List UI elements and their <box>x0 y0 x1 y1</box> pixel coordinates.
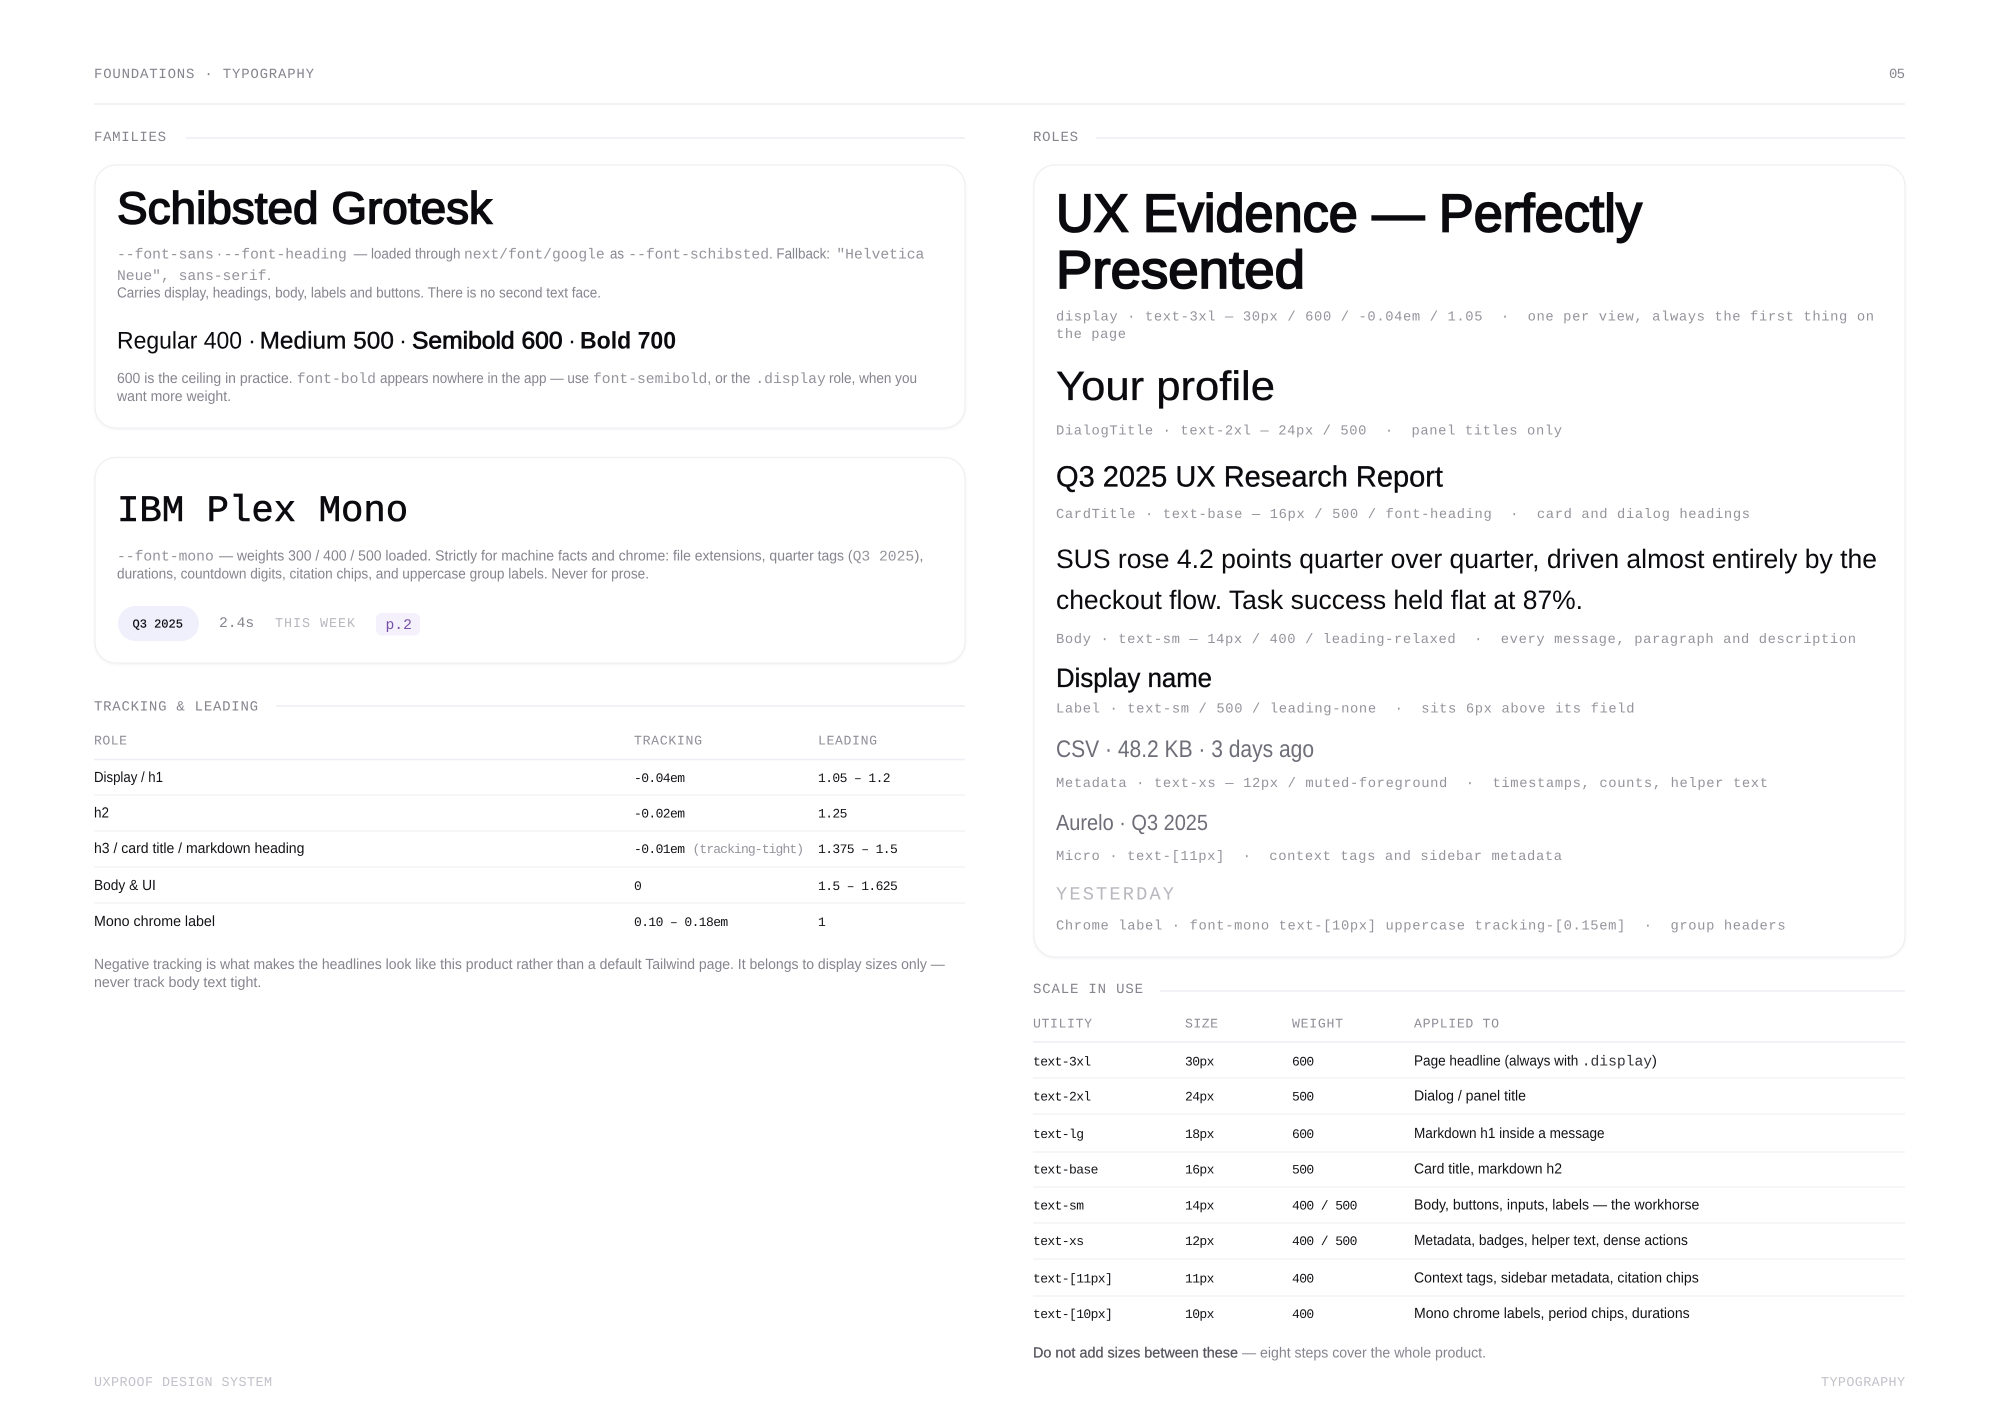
weights specimen: Medium 500 <box>260 328 394 354</box>
role: dialog title: Your profile <box>1056 363 1275 409</box>
tracking note <box>94 957 945 991</box>
row: text-[10px]: Mono chrome labels, period chips, durations <box>1414 1306 1690 1322</box>
tracking note: Negative tracking is what makes the headlines look like this product rather than a default Tailwind page. It belongs to display sizes only — <box>94 957 945 973</box>
row: h3: h3 / card title / markdown heading <box>94 841 304 857</box>
role: metadata: CSV · 48.2 KB · 3 days ago <box>1056 736 1314 763</box>
row: h3: 1.375 – 1.5 <box>818 842 897 857</box>
panel: Schibsted Grotesk family card <box>95 165 965 428</box>
role: display headline <box>1056 184 1874 343</box>
role: card title: CardTitle · text-base — 16px / 500 / font-heading · card and dialog headings <box>1056 508 1750 523</box>
page header: FOUNDATIONS · TYPOGRAPHY <box>94 67 315 83</box>
row: text-lg: Markdown h1 inside a message <box>1414 1126 1605 1142</box>
row: text-base: 16px <box>1185 1162 1215 1178</box>
row: mono chrome: 0.10 – 0.18em <box>634 915 728 930</box>
row: text-[10px]: 400 <box>1292 1307 1314 1322</box>
family description: · <box>217 246 222 262</box>
row: text-xs: Metadata, badges, helper text, dense actions <box>1414 1233 1688 1249</box>
row: text-3xl <box>1033 1053 1905 1078</box>
page header <box>94 67 1905 104</box>
role: metadata <box>1056 736 1768 792</box>
table header: SIZE <box>1185 1016 1218 1032</box>
row: text-3xl: ) <box>1652 1053 1657 1069</box>
row: text-3xl: 30px <box>1185 1054 1215 1069</box>
role: label: Display name <box>1056 663 1212 693</box>
family description: "Helvetica <box>836 248 925 264</box>
role: card title <box>1056 460 1750 523</box>
weights specimen: Bold 700 <box>580 328 676 354</box>
table header: ROLE <box>94 734 127 748</box>
weight note: font-bold <box>297 372 376 388</box>
role: dialog title: DialogTitle · text-2xl — 24px / 500 · panel titles only <box>1056 424 1562 440</box>
role: micro: Micro · text-[11px] · context tags and sidebar metadata <box>1056 850 1562 865</box>
row: h2: h2 <box>94 806 109 822</box>
row: h2 <box>94 806 965 831</box>
row: text-2xl: text-2xl <box>1033 1090 1091 1104</box>
row: text-lg: text-lg <box>1033 1127 1083 1142</box>
weight note: appears nowhere in the app — use <box>380 371 589 387</box>
scale note <box>1033 1346 1486 1362</box>
page footer <box>94 1376 1905 1391</box>
row: text-xs: 400 / 500 <box>1292 1234 1357 1249</box>
weight note <box>116 371 917 405</box>
page header: 05 <box>1889 67 1905 83</box>
row: text-3xl: text-3xl <box>1033 1054 1091 1069</box>
family description: next/font/google <box>464 248 605 264</box>
family description: Carries display, headings, body, labels and buttons. There is no second text face. <box>117 286 601 302</box>
row: text-base <box>1033 1162 1905 1187</box>
role: chrome label: YESTERDAY <box>1056 884 1174 906</box>
family description: . Fallback: <box>769 246 830 262</box>
chip: citation p.2 <box>376 613 420 636</box>
table header: UTILITY <box>1033 1016 1092 1032</box>
table: scale in use <box>1033 1016 1905 1322</box>
weight note: role, when you <box>829 371 917 387</box>
section heading: roles: ROLES <box>1033 130 1078 146</box>
weight note: .display <box>755 372 826 388</box>
role: dialog title <box>1056 363 1562 440</box>
scale note: — eight steps cover the whole product. <box>1242 1346 1486 1362</box>
chip: Q3 2025: Q3 2025 <box>132 617 183 631</box>
role: micro: Aurelo · Q3 2025 <box>1056 810 1208 835</box>
role: body: SUS rose 4.2 points quarter over quarter, driven almost entirely by the <box>1056 544 1877 574</box>
role: body: checkout flow. Task success held flat at 87%. <box>1056 585 1583 615</box>
role: display headline: display · text-3xl — 30px / 600 / -0.04em / 1.05 · one per view, always the first thing on <box>1056 310 1874 326</box>
weights specimen: Regular 400 <box>117 328 242 354</box>
family description: Q3 2025 <box>853 550 914 566</box>
row: h3: (tracking-tight) <box>692 842 804 857</box>
row: text-[11px] <box>1033 1270 1905 1296</box>
row: text-[10px]: 10px <box>1185 1307 1215 1322</box>
row: text-2xl: 24px <box>1185 1090 1215 1104</box>
family description: --font-heading <box>224 248 347 264</box>
row: text-sm: 400 / 500 <box>1292 1198 1357 1214</box>
family name: Schibsted Grotesk: Schibsted Grotesk <box>117 182 493 234</box>
row: text-2xl: Dialog / panel title <box>1414 1088 1526 1104</box>
row: text-[11px]: Context tags, sidebar metadata, citation chips <box>1414 1270 1699 1286</box>
row: text-lg: 600 <box>1292 1127 1314 1142</box>
row: display <box>94 770 965 795</box>
table header: TRACKING <box>634 734 702 748</box>
section heading: families: FAMILIES <box>94 130 166 146</box>
role: display headline: Presented <box>1056 241 1305 300</box>
scale note: Do not add sizes between these <box>1033 1346 1238 1362</box>
row: text-sm: text-sm <box>1033 1198 1084 1214</box>
weights specimen: · <box>399 328 407 354</box>
role: display headline: UX Evidence — Perfectly <box>1056 184 1642 244</box>
row: text-lg <box>1033 1126 1905 1152</box>
table header: WEIGHT <box>1292 1016 1343 1032</box>
family description <box>117 246 925 302</box>
table: tracking and leading <box>94 734 965 930</box>
weights specimen: Semibold 600 <box>412 328 562 354</box>
page footer: TYPOGRAPHY <box>1821 1376 1905 1391</box>
row: text-[10px]: text-[10px] <box>1033 1307 1112 1322</box>
row: text-base: text-base <box>1033 1162 1098 1178</box>
tracking note: never track body text tight. <box>94 975 261 991</box>
weight note: want more weight. <box>116 389 231 405</box>
family description: --font-sans <box>117 248 214 264</box>
section heading: tracking and leading: TRACKING & LEADING <box>94 699 258 715</box>
role: label: Label · text-sm / 500 / leading-none · sits 6px above its field <box>1056 702 1634 718</box>
row: h2: -0.02em <box>634 806 685 822</box>
panel: roles card <box>1034 165 1905 957</box>
row: text-base: Card title, markdown h2 <box>1414 1162 1562 1178</box>
page footer: UXPROOF DESIGN SYSTEM <box>94 1376 272 1391</box>
family description: as <box>610 246 624 262</box>
row: mono chrome <box>94 914 826 930</box>
row: display: 1.05 – 1.2 <box>818 771 890 786</box>
section heading: scale in use: SCALE IN USE <box>1033 982 1143 998</box>
row: text-sm: 14px <box>1185 1198 1215 1214</box>
row: text-sm <box>1033 1198 1905 1223</box>
weight note: font-semibold <box>593 372 707 388</box>
table header: APPLIED TO <box>1414 1016 1499 1032</box>
row: display: -0.04em <box>634 771 685 786</box>
row: h3 <box>94 841 965 867</box>
weight note: , or the <box>707 371 750 387</box>
chip: Q3 2025 <box>118 606 199 641</box>
role: body: Body · text-sm — 14px / 400 / leading-relaxed · every message, paragraph and description <box>1056 633 1856 648</box>
table header <box>94 734 965 760</box>
row: text-xs: 12px <box>1185 1234 1215 1249</box>
row: text-[10px] <box>1033 1306 1690 1322</box>
row: display: Display / h1 <box>94 770 163 786</box>
weights specimen: · <box>568 328 576 354</box>
row: text-3xl: Page headline (always with <box>1414 1053 1578 1069</box>
row: text-[11px]: 11px <box>1185 1272 1215 1286</box>
sample: chrome label: THIS WEEK <box>275 617 356 632</box>
table header: LEADING <box>818 734 877 748</box>
table header <box>1033 1016 1905 1042</box>
row: text-[11px]: text-[11px] <box>1033 1272 1112 1286</box>
weights specimen <box>117 328 676 354</box>
role: micro <box>1056 810 1562 865</box>
weight note: 600 is the ceiling in practice. <box>117 371 293 387</box>
role: chrome label <box>1056 884 1786 935</box>
family description <box>117 549 924 583</box>
role: display headline: the page <box>1056 328 1126 343</box>
row: mono chrome: Mono chrome label <box>94 914 215 930</box>
row: body <box>94 878 965 903</box>
role: chrome label: Chrome label · font-mono text-[10px] uppercase tracking-[0.15em] · group headers <box>1056 920 1786 935</box>
row: text-xs: text-xs <box>1033 1234 1083 1249</box>
panel: IBM Plex Mono family card <box>95 458 965 663</box>
weights specimen: · <box>248 328 256 354</box>
family description: — loaded through <box>354 246 460 262</box>
row: h2: 1.25 <box>818 806 847 822</box>
family description: ), <box>914 549 924 565</box>
row: text-3xl: 600 <box>1292 1054 1314 1069</box>
family description: durations, countdown digits, citation chips, and uppercase group labels. Never for prose. <box>117 567 649 583</box>
row: text-sm: Body, buttons, inputs, labels — the workhorse <box>1414 1198 1699 1214</box>
row: text-lg: 18px <box>1185 1127 1215 1142</box>
family description: --font-mono <box>117 550 214 566</box>
row: text-3xl: .display <box>1582 1054 1652 1070</box>
chip: citation p.2: p.2 <box>386 618 412 634</box>
role: metadata: Metadata · text-xs — 12px / muted-foreground · timestamps, counts, helper text <box>1056 777 1768 792</box>
family description: --font-schibsted <box>628 248 769 264</box>
row: text-[11px]: 400 <box>1292 1272 1314 1286</box>
family description: Neue", sans-serif <box>117 269 267 285</box>
row: body: 1.5 – 1.625 <box>818 879 897 894</box>
role: body <box>1056 544 1877 648</box>
role: card title: Q3 2025 UX Research Report <box>1056 460 1443 494</box>
row: text-2xl <box>1033 1088 1905 1114</box>
family description: . <box>267 268 271 284</box>
family description: — weights 300 / 400 / 500 loaded. Strictly for machine facts and chrome: file extensions, quarter tags ( <box>219 549 853 565</box>
role: label <box>1056 663 1634 718</box>
row: body: 0 <box>634 879 641 894</box>
row: text-2xl: 500 <box>1292 1090 1314 1104</box>
sample: duration: 2.4s <box>219 616 254 632</box>
row: h3: -0.01em <box>634 842 685 857</box>
family name: IBM Plex Mono: IBM Plex Mono <box>117 491 408 533</box>
row: body: Body & UI <box>94 878 156 894</box>
row: text-xs <box>1033 1233 1905 1259</box>
row: text-base: 500 <box>1292 1162 1314 1178</box>
row: mono chrome: 1 <box>818 915 826 930</box>
